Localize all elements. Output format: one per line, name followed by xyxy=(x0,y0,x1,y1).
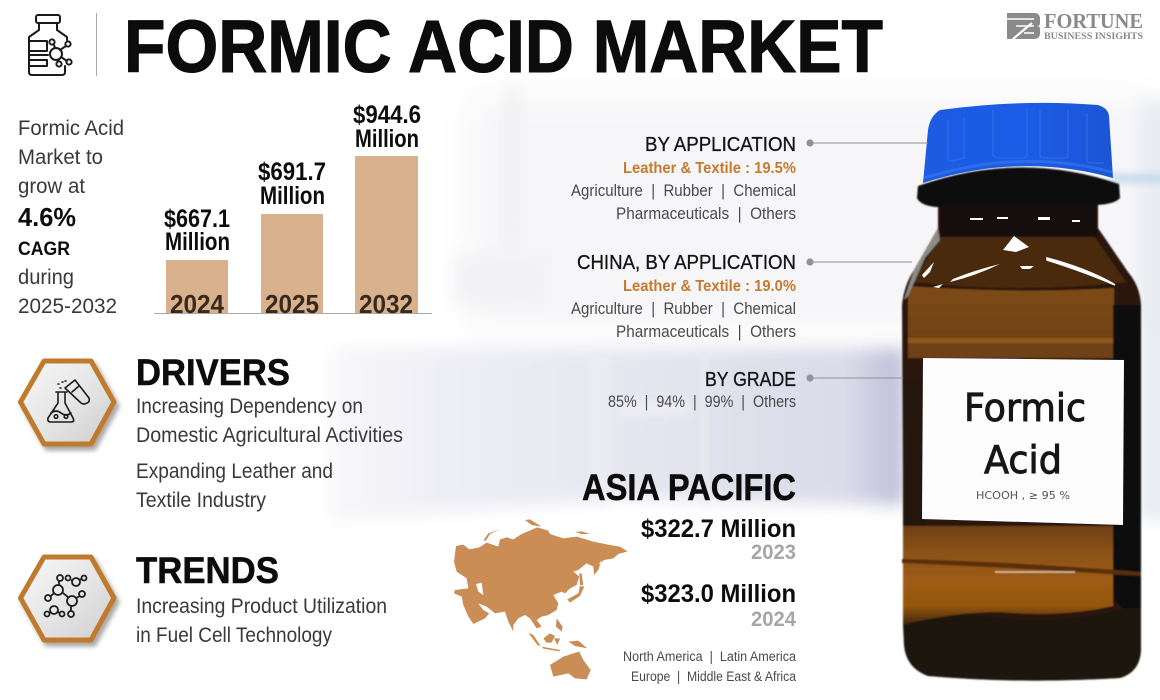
right dark stripe xyxy=(1113,305,1141,610)
bar chart: $691.7 xyxy=(258,158,326,186)
panel: by grade: BY GRADE xyxy=(705,369,796,391)
panel: by grade xyxy=(608,369,796,411)
panel: china by application: Leather & Textile : 19.0% xyxy=(623,278,796,295)
callout leader lines xyxy=(806,139,928,382)
text: trends list: in Fuel Cell Technology xyxy=(136,624,332,647)
panel: Asia Pacific stats xyxy=(582,467,796,684)
text: trends list: Increasing Product Utilization xyxy=(136,595,387,618)
map: Asia Pacific xyxy=(454,519,628,679)
cap ribs xyxy=(924,108,1112,178)
neck xyxy=(940,205,1097,237)
panel: by application: BY APPLICATION xyxy=(645,134,796,156)
dark left stripe beside label xyxy=(903,380,925,530)
text: CAGR statement: Formic Acid xyxy=(18,117,124,140)
collar xyxy=(917,167,1120,207)
amber body xyxy=(908,286,1114,358)
text: drivers list: Expanding Leather and xyxy=(136,460,333,483)
divider xyxy=(96,13,97,76)
panel: by application: Leather & Textile : 19.5% xyxy=(623,160,796,177)
logo: Fortune Business Insights xyxy=(1007,9,1143,42)
text: CAGR statement: CAGR xyxy=(18,239,70,260)
bar chart: 2024 xyxy=(170,289,225,319)
text: drivers list: Textile Industry xyxy=(136,489,266,512)
glass highlights xyxy=(922,217,1115,288)
bar chart xyxy=(154,101,432,319)
title: FORMIC ACID MARKET xyxy=(124,5,883,88)
panel: by application: Pharmaceuticals | Others xyxy=(616,205,796,223)
text: CAGR statement: 4.6% xyxy=(18,202,76,232)
panel: Asia Pacific stats: $323.0 Million xyxy=(641,580,796,608)
bar chart: $944.6 xyxy=(353,101,421,129)
text: trends list xyxy=(136,595,387,647)
icon: medicine bottle with molecule xyxy=(29,15,72,75)
icon: drivers hexagon with flask xyxy=(20,361,114,444)
panel: by application: Agriculture | Rubber | Chemical xyxy=(571,182,796,200)
heading: drivers: DRIVERS xyxy=(136,352,290,393)
shoulder glass xyxy=(912,236,1126,288)
bar chart: Million xyxy=(260,182,325,210)
text: drivers list: Domestic Agricultural Activities xyxy=(136,424,403,447)
bar chart: $667.1 xyxy=(164,205,230,233)
logo: Fortune Business Insights: FORTUNE xyxy=(1044,9,1143,33)
heading: trends: TRENDS xyxy=(136,550,279,591)
text: CAGR statement: 2025-2032 xyxy=(18,295,117,318)
panel: Asia Pacific stats: 2024 xyxy=(751,608,796,631)
text: drivers list xyxy=(136,395,403,512)
text: CAGR statement: Market to xyxy=(18,146,103,169)
bottle photo: HCOOH , ≥ 95 % xyxy=(976,489,1070,502)
logo: Fortune Business Insights: BUSINESS INSIGHTS xyxy=(1044,32,1143,42)
panel: Asia Pacific stats: ASIA PACIFIC xyxy=(582,467,796,508)
panel: Asia Pacific stats: 2023 xyxy=(751,541,796,564)
amber liquid below label xyxy=(903,526,1113,626)
bottle photo: Formic xyxy=(964,386,1086,430)
panel: Asia Pacific stats: North America | Latin America xyxy=(623,649,796,664)
blue cap xyxy=(923,103,1113,183)
text: CAGR statement xyxy=(18,117,124,318)
panel: Asia Pacific stats: $322.7 Million xyxy=(641,515,796,543)
panel: china by application xyxy=(571,252,796,341)
bar chart: 2025 xyxy=(265,289,319,319)
text: drivers list: Increasing Dependency on xyxy=(136,395,363,418)
icon: trends hexagon with molecules xyxy=(20,557,114,640)
text: CAGR statement: grow at xyxy=(18,175,85,198)
dark base xyxy=(903,608,1141,681)
panel: china by application: Agriculture | Rubber | Chemical xyxy=(571,300,796,318)
panel: by application xyxy=(571,134,796,223)
text: CAGR statement: during xyxy=(18,266,74,289)
bottle photo xyxy=(902,103,1141,681)
bottle photo: Acid xyxy=(984,438,1062,482)
panel: Asia Pacific stats: Europe | Middle East & Africa xyxy=(631,669,796,684)
panel: by grade: 85% | 94% | 99% | Others xyxy=(608,393,796,411)
panel: china by application: Pharmaceuticals | Others xyxy=(616,323,796,341)
base ring xyxy=(902,559,1141,576)
bar chart: Million xyxy=(355,125,419,153)
bar chart: 2032 xyxy=(359,289,413,319)
bottle silhouette xyxy=(902,203,1141,681)
panel: china by application: CHINA, BY APPLICATION xyxy=(577,252,796,274)
label xyxy=(922,358,1124,525)
bar chart: Million xyxy=(165,228,230,256)
left grey glass edge xyxy=(904,228,940,300)
